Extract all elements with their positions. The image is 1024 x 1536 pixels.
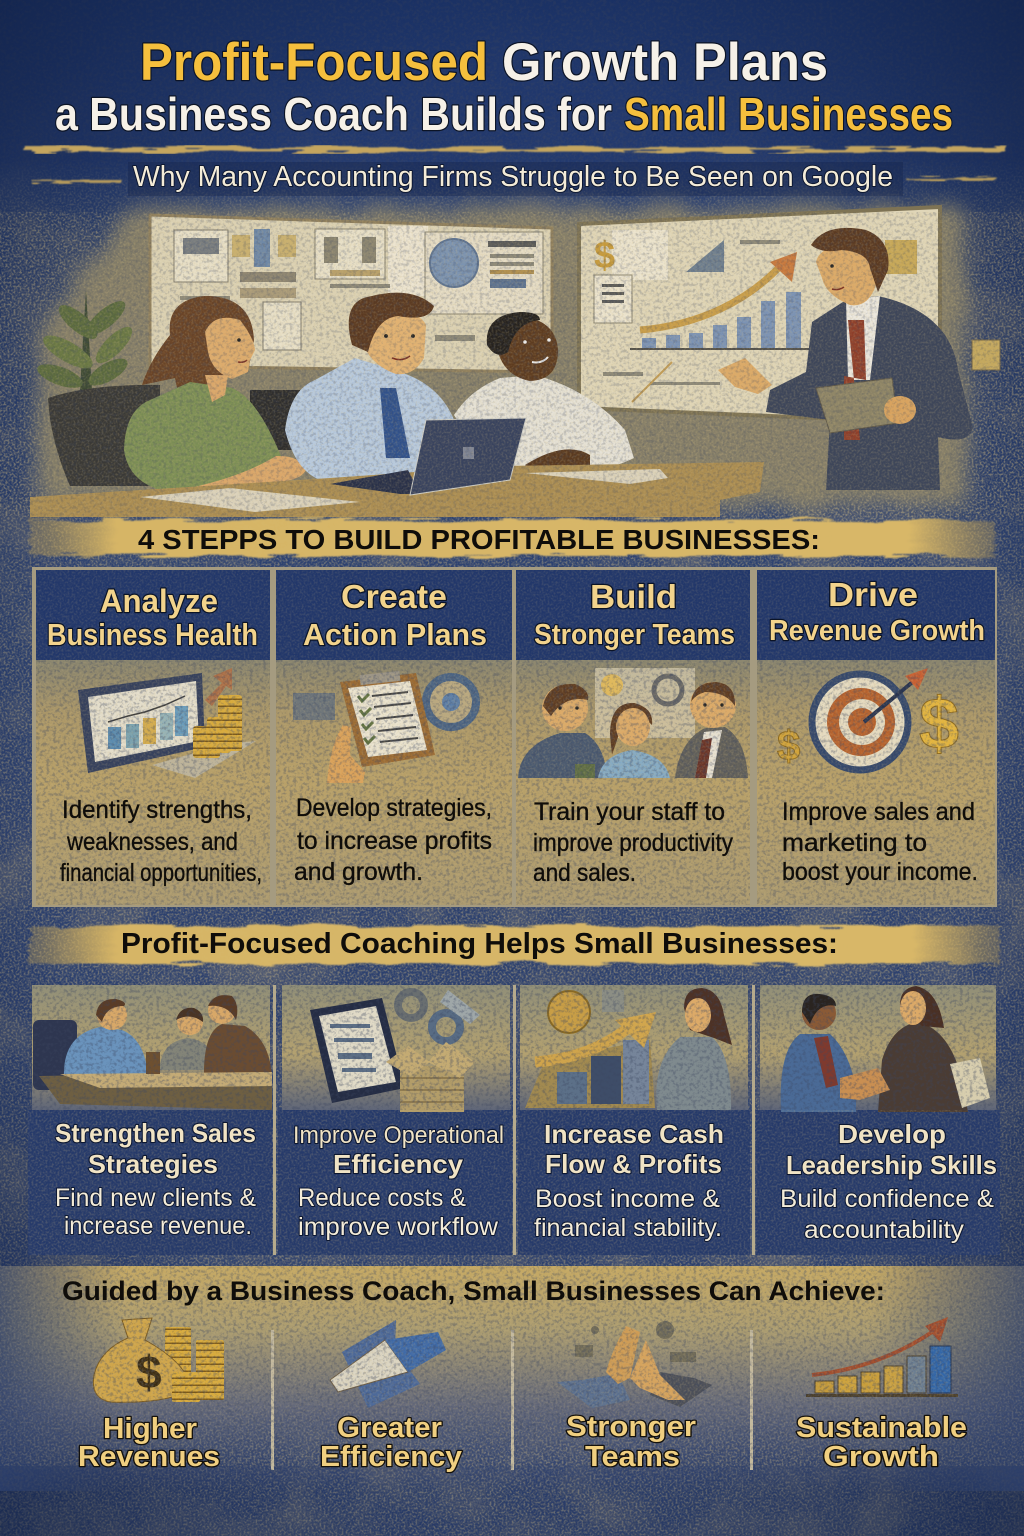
panel: operational efficiency: Reduce costs & xyxy=(298,1184,466,1212)
icon: money bag and coins xyxy=(93,1318,224,1402)
panel: create: to increase profits xyxy=(297,827,492,855)
panel: cash flow: Boost income & xyxy=(535,1185,720,1213)
heading: Guided by a Business Coach, Small Businesses Can Achieve: xyxy=(62,1276,885,1306)
panel: operational efficiency: Improve Operational xyxy=(293,1122,504,1149)
section: outcomes: Efficiency xyxy=(320,1441,462,1473)
panel: analyze: financial opportunities, xyxy=(60,859,262,887)
icon: clipboard and hand xyxy=(293,671,476,783)
panel: drive: Improve sales and xyxy=(782,798,975,826)
panel: build: Train your staff to xyxy=(534,798,725,826)
panel: cash flow: Flow & Profits xyxy=(545,1149,722,1179)
illustration: coaching meeting xyxy=(0,207,1024,517)
panel: analyze xyxy=(36,570,270,905)
panel: create: Create xyxy=(341,578,447,615)
growth arrow xyxy=(640,262,784,330)
section: outcomes: Teams xyxy=(585,1441,680,1473)
table xyxy=(30,462,764,517)
subtitle: Why Many Accounting Firms Struggle to Be Seen on Google xyxy=(133,161,893,193)
panel: operational efficiency: improve workflow xyxy=(298,1213,499,1241)
panel: create: Action Plans xyxy=(303,617,487,652)
panel: analyze: Identify strengths, xyxy=(62,796,252,824)
title: Small Businesses xyxy=(624,88,953,140)
section: outcomes: Growth xyxy=(823,1441,939,1473)
title divider and subtitle band xyxy=(22,147,1007,196)
panel: analyze: weaknesses, and xyxy=(66,828,238,856)
panel: build: and sales. xyxy=(533,859,636,887)
panel: leadership: Leadership Skills xyxy=(786,1150,997,1180)
man in white shirt xyxy=(454,312,634,468)
section: outcomes: Sustainable xyxy=(796,1412,967,1444)
icon: monitor, chart and coins xyxy=(78,668,256,778)
icon: team of three xyxy=(518,668,748,778)
chairs xyxy=(48,385,160,486)
left whiteboard xyxy=(150,215,552,372)
illustration: sales meeting xyxy=(33,995,272,1110)
section: outcomes xyxy=(0,1266,1024,1536)
section: outcomes: Greater xyxy=(337,1412,442,1444)
panel: sales strategies: Find new clients & xyxy=(55,1184,256,1212)
laptop xyxy=(330,418,526,495)
icon: target and dollars: $ xyxy=(919,684,959,764)
panel frame xyxy=(32,567,997,907)
right whiteboard and growth chart: $ xyxy=(594,235,615,277)
panels: coaching benefits xyxy=(28,985,1000,1255)
panel: create xyxy=(276,570,512,905)
banner: coaching helps: Profit-Focused Coaching Helps Small Businesses: xyxy=(121,928,838,960)
panel: create: Develop strategies, xyxy=(296,794,492,822)
banner: 4 steps: 4 STEPPS TO BUILD PROFITABLE BUSINESSES: xyxy=(138,524,820,555)
illustration: phone, gears and boxes xyxy=(310,990,480,1112)
panel: sales strategies xyxy=(28,985,272,1255)
banner: 4 steps xyxy=(30,520,995,556)
panel: drive: boost your income. xyxy=(782,858,978,886)
panel: leadership xyxy=(756,985,1000,1255)
icon: growth chart xyxy=(806,1317,958,1397)
title xyxy=(55,33,953,140)
side note on wall xyxy=(972,340,1000,370)
panel: sales strategies: Strategies xyxy=(88,1149,218,1179)
panels: four steps xyxy=(32,567,997,907)
panel: operational efficiency: Efficiency xyxy=(333,1149,464,1179)
bars xyxy=(642,292,801,348)
panel: sales strategies: increase revenue. xyxy=(64,1212,252,1240)
panel: cash flow: Increase Cash xyxy=(544,1119,724,1149)
panel: leadership: Develop xyxy=(838,1119,946,1149)
panel: build: improve productivity xyxy=(533,829,733,857)
icon: high five xyxy=(557,1321,712,1408)
panel: drive: Drive xyxy=(828,576,918,613)
panel: cash flow xyxy=(518,985,750,1255)
panel: analyze: Analyze xyxy=(100,583,218,619)
title: Profit-Focused xyxy=(140,33,488,92)
panel: drive xyxy=(757,570,995,905)
coach xyxy=(718,228,973,490)
panel: build: Build xyxy=(590,578,677,615)
panel: leadership: accountability xyxy=(804,1216,965,1244)
right whiteboard and growth chart xyxy=(579,207,940,423)
panel: leadership: Build confidence & xyxy=(780,1185,994,1213)
banner: coaching helps xyxy=(30,926,1000,964)
panel: build: Stronger Teams xyxy=(534,619,735,651)
panel: drive: marketing to xyxy=(782,829,927,857)
woman in green xyxy=(124,296,306,496)
title: a Business Coach Builds for xyxy=(55,88,612,140)
panel: sales strategies: Strengthen Sales xyxy=(55,1118,256,1148)
panel: drive: Revenue Growth xyxy=(769,615,985,647)
title: Growth Plans xyxy=(502,33,828,92)
icon: money bag and coins: $ xyxy=(136,1346,162,1398)
panel: operational efficiency xyxy=(278,985,512,1255)
icon: efficiency tool xyxy=(330,1320,446,1408)
panel: build xyxy=(516,570,750,905)
icon: target and dollars: $ xyxy=(777,722,800,769)
illustration: rising profits and advisor xyxy=(525,988,732,1110)
panel: create: and growth. xyxy=(294,858,423,886)
man in blue shirt xyxy=(285,293,460,480)
plant xyxy=(34,290,137,393)
section: outcomes: Stronger xyxy=(566,1411,696,1443)
section: outcomes: Higher xyxy=(103,1413,197,1445)
wall backdrop xyxy=(40,210,965,505)
panel: cash flow: financial stability. xyxy=(534,1214,722,1242)
illustration: handshake xyxy=(781,986,990,1112)
panel: analyze: Business Health xyxy=(47,617,258,652)
section: outcomes: Revenues xyxy=(78,1441,220,1473)
icon: target and dollars xyxy=(777,668,959,770)
